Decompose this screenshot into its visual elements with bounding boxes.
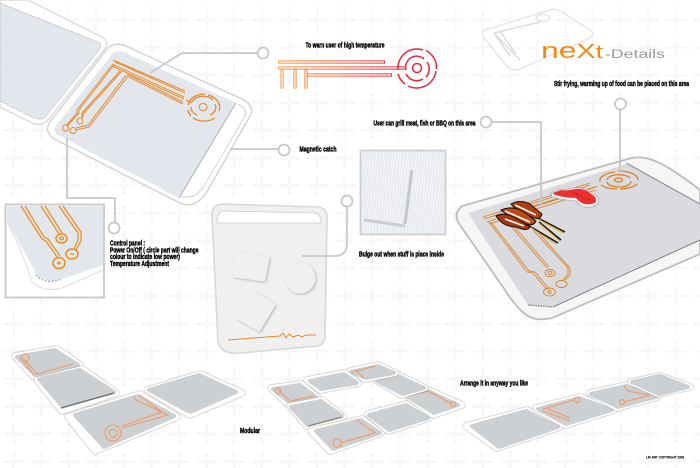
text: arrange: Arrange it in anyway you like <box>460 380 528 388</box>
left tray, top section <box>0 0 107 124</box>
modular group: ring <box>271 365 462 451</box>
modular group: row <box>466 376 690 448</box>
text: copyright: LIK ART COPYRIGHT 2008 <box>646 454 685 460</box>
inset: bulge detail <box>360 150 446 234</box>
text: bulge: Bulge out when stuff is place inside <box>359 252 444 258</box>
orange power line <box>228 333 316 340</box>
warning circuit graphic <box>278 49 437 88</box>
bulge: square <box>234 253 268 280</box>
text: control panel description: Temperature Adjustment <box>110 261 169 268</box>
callout: bulge <box>302 196 352 256</box>
food: steak <box>551 188 598 207</box>
white tray with bulges <box>212 204 327 353</box>
callout: control panel <box>67 137 120 234</box>
text: control panel description: Control panel : <box>110 240 145 248</box>
logo: neXt-Details: -Details <box>605 49 665 61</box>
text: modular: Modular <box>240 428 260 435</box>
bulge: circle <box>286 264 314 292</box>
heading: high temperature: To warn user of high temperature <box>306 42 385 50</box>
heading: magnetic catch: Magnetic catch <box>300 146 336 154</box>
heading: grill area: User can grill meat, fish or BBQ on this area <box>374 120 476 128</box>
main tray, top section <box>48 44 252 205</box>
circuit: main tray <box>62 60 220 134</box>
text: control panel description <box>110 240 199 268</box>
callout: grill area <box>480 116 541 205</box>
callout: high temperature warning <box>150 48 268 73</box>
circuit: large tray <box>483 171 638 296</box>
logo: neXt-Details: ne X t <box>541 38 603 63</box>
callout: magnetic catch <box>230 144 290 156</box>
inset: control panel detail <box>6 204 104 298</box>
large tray with food <box>456 157 700 319</box>
logo: neXt-Details <box>541 38 665 63</box>
food: skewers <box>496 202 565 244</box>
ghost logo tray <box>482 9 593 70</box>
text: control panel description: Power On/Off ( circle part will change <box>110 247 199 254</box>
text: control panel description: colour to indicate low power) <box>110 254 180 261</box>
bulge: diamond <box>238 293 274 330</box>
callout: stir frying area <box>615 98 626 172</box>
modular group: left <box>15 349 242 451</box>
